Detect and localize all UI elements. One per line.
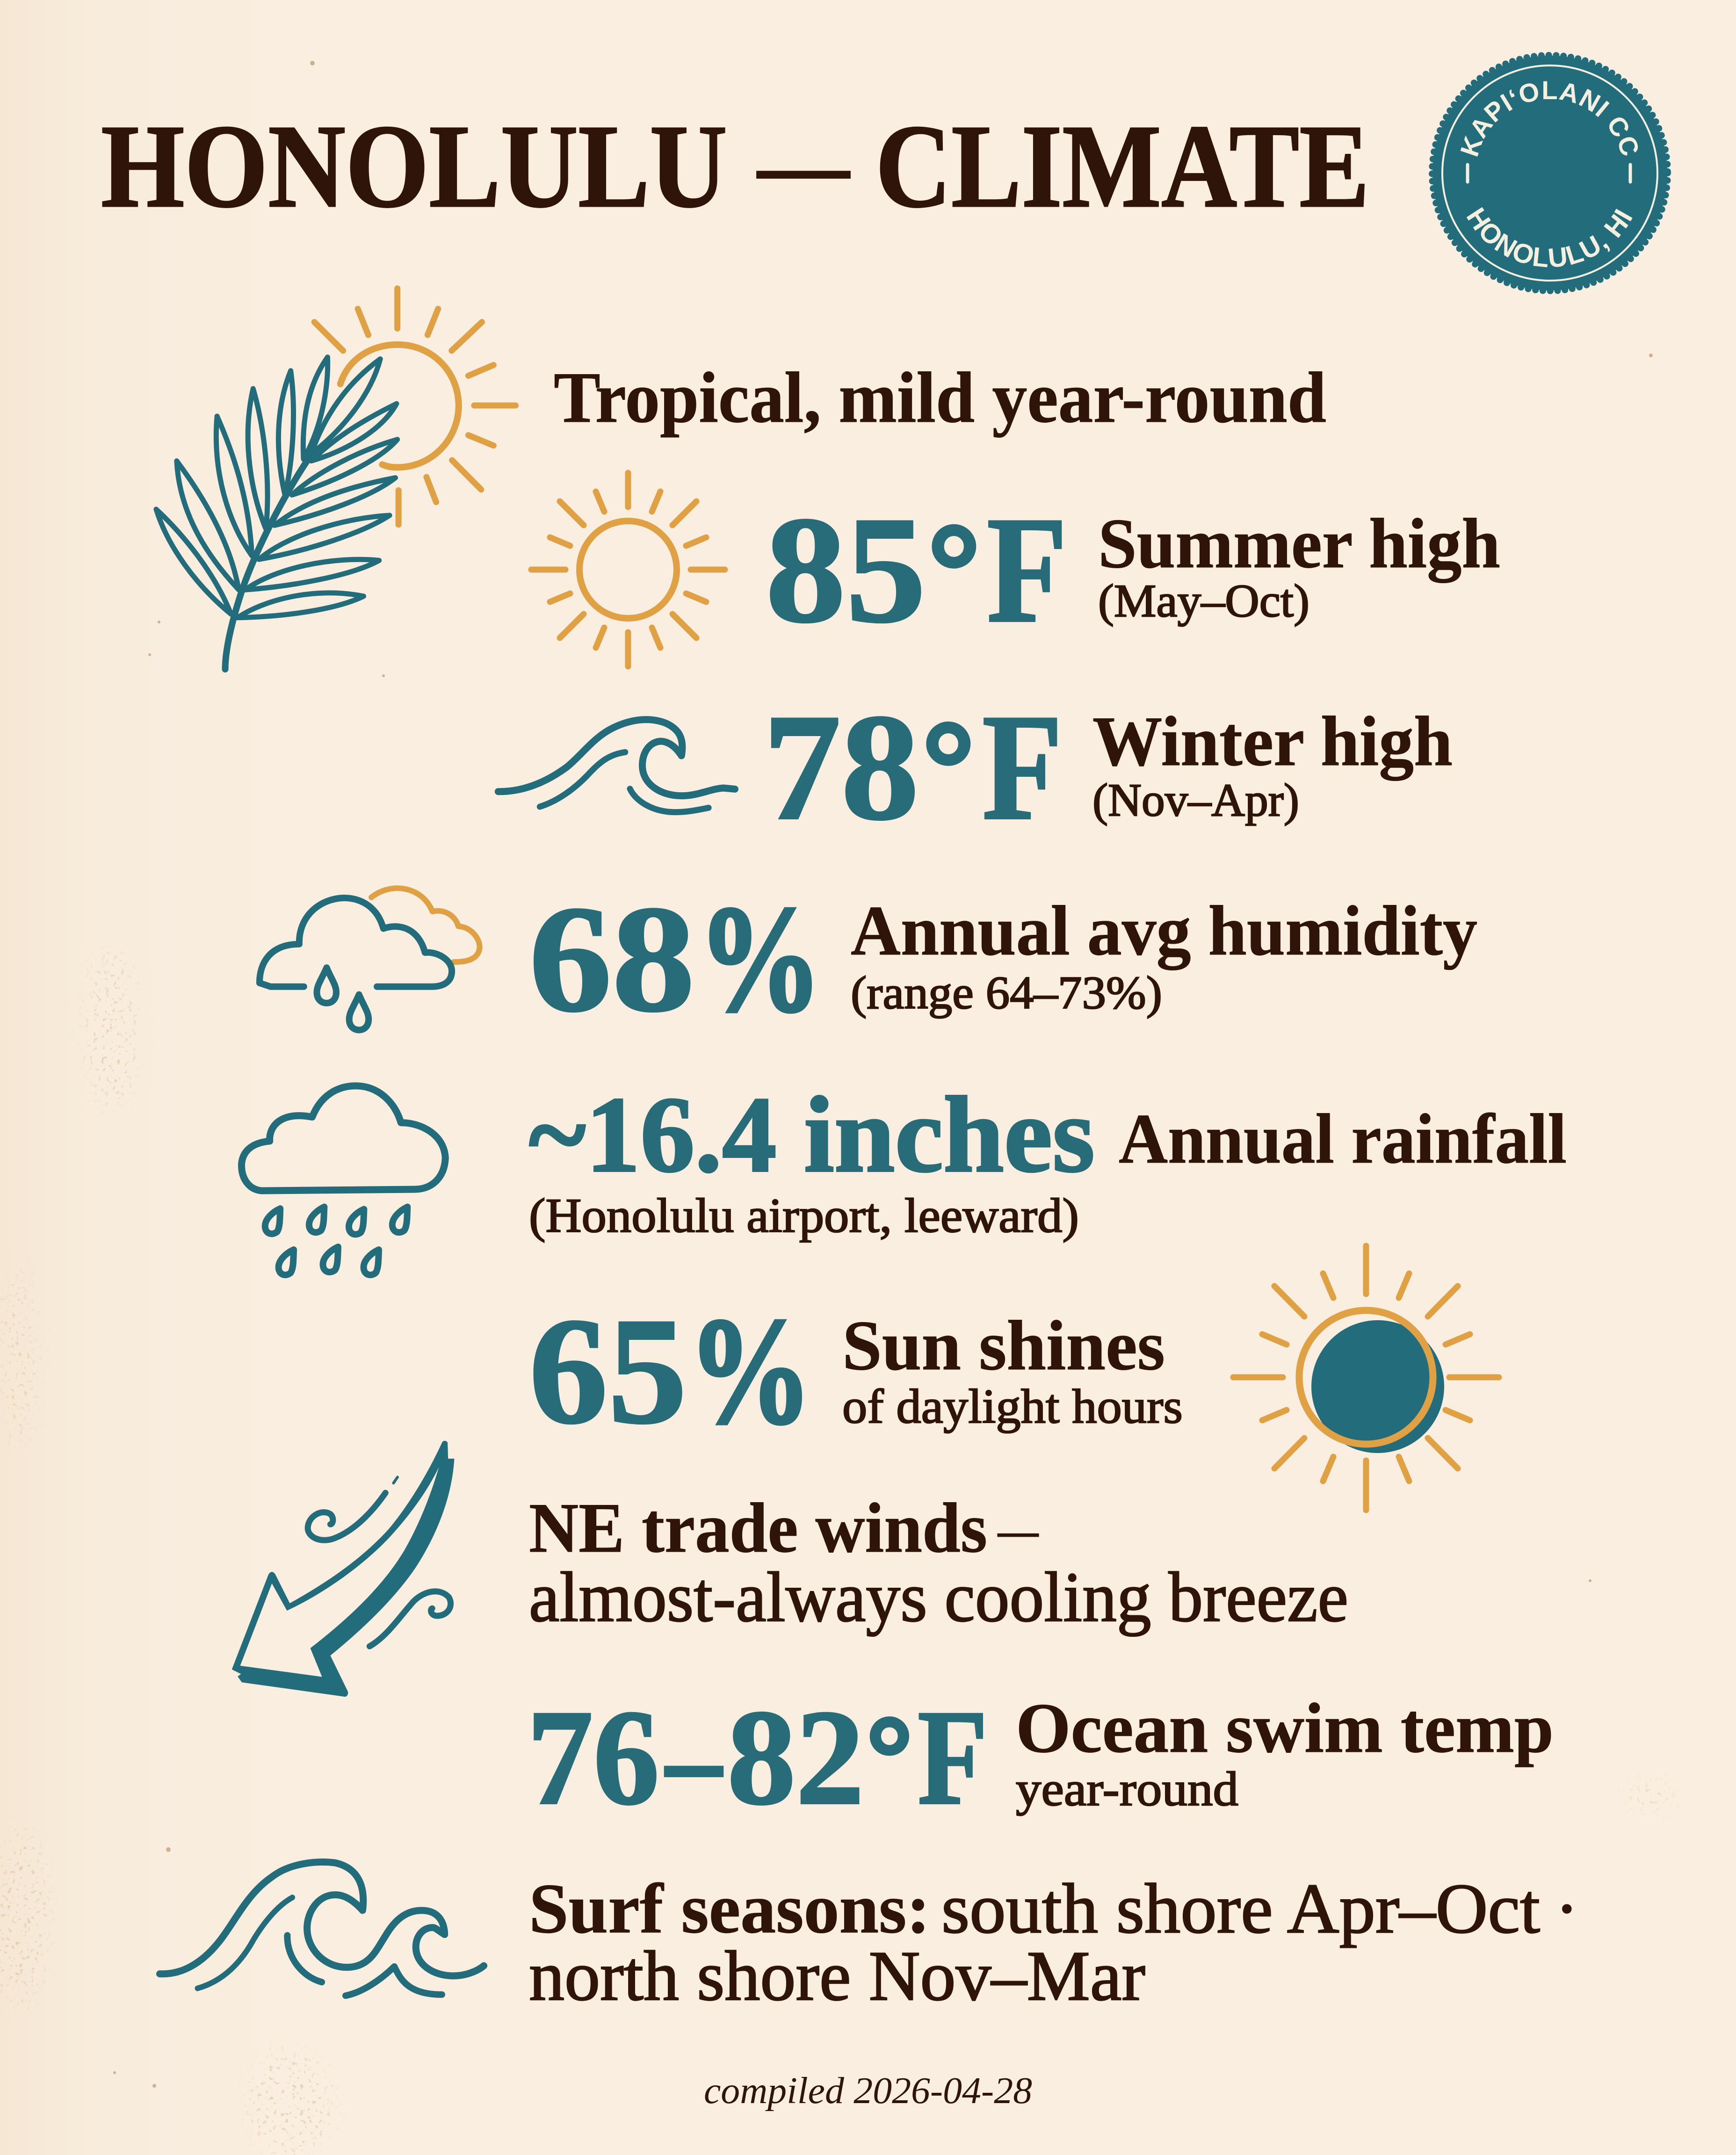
icon: palm leaf with sun [156, 289, 516, 669]
title: — [757, 97, 850, 229]
icon: sun with teal disc [1233, 1246, 1499, 1510]
icon: sun outline [531, 473, 725, 666]
label: Annual avg humidity [851, 891, 1477, 970]
icon: leaf fronds [156, 357, 398, 669]
sublabel: year-round [1016, 1762, 1238, 1816]
stat: ~16.4 inches rainfall [529, 1075, 1567, 1243]
south shore: south shore Apr–Oct [941, 1869, 1540, 1948]
south shore: · [1555, 1869, 1579, 1948]
title [101, 97, 1369, 232]
sublabel: (Nov–Apr) [1092, 774, 1299, 826]
number: ° [928, 497, 980, 642]
line one: NE trade winds [529, 1489, 987, 1567]
number: 76 [527, 1682, 659, 1833]
icon: cloud with sun-toned cloud and drops [260, 888, 480, 1030]
number: – [664, 1682, 724, 1833]
label: Ocean swim temp [1016, 1689, 1554, 1767]
stat: 85°F summer high [766, 485, 1500, 654]
number [529, 874, 822, 1043]
stamp: Kapi'olani CC, Honolulu HI [1432, 55, 1668, 291]
icon: wave [498, 720, 735, 812]
number: F [982, 682, 1063, 852]
icon: surf waves [160, 1862, 484, 1996]
line one: — [997, 1489, 1039, 1567]
number [529, 1286, 812, 1455]
sublabel: (Honolulu airport, leeward) [529, 1189, 1079, 1243]
text: tropical summary: Tropical, mild year-round [554, 357, 1326, 438]
number: F [918, 1682, 988, 1833]
sublabel: (range 64–73%) [851, 967, 1162, 1019]
stat: 78°F winter high [763, 682, 1453, 852]
icon: wind arrow [232, 1441, 454, 1697]
stamp: Kapi'olani CC, Honolulu HI: HONOLULU, HI [1461, 202, 1639, 274]
label: Annual rainfall [1119, 1099, 1567, 1178]
number: 65 [529, 1286, 687, 1455]
number: 68 [529, 874, 695, 1043]
number: ° [922, 694, 975, 839]
number: F [987, 485, 1067, 654]
number [527, 1682, 988, 1833]
sublabel: (May–Oct) [1098, 575, 1309, 627]
sublabel: of daylight hours [842, 1380, 1183, 1433]
line two: almost-always cooling breeze [529, 1558, 1348, 1636]
text: surf seasons [529, 1869, 1579, 2015]
title: CLIMATE [875, 101, 1369, 232]
number [763, 682, 1063, 852]
number: ~16.4 inches [529, 1075, 1095, 1195]
number: 85 [766, 485, 926, 654]
number: % [688, 1286, 812, 1455]
label: Winter high [1092, 702, 1453, 781]
icon: rain cloud [241, 1086, 445, 1275]
footer: compiled date: compiled 2026-04-28 [704, 2070, 1032, 2112]
title: HONOLULU [101, 101, 727, 232]
number: 82 [727, 1682, 864, 1833]
label: Summer high [1098, 504, 1500, 583]
text: trade winds [529, 1489, 1348, 1636]
surf heading: Surf seasons: [529, 1869, 930, 1948]
number: 78 [763, 682, 919, 852]
stat: 76–82°F ocean temp [527, 1682, 1554, 1833]
number: % [698, 874, 822, 1043]
number [766, 485, 1067, 654]
stat: 65% sunshine [529, 1286, 1183, 1455]
number: ° [867, 1693, 912, 1820]
north shore: north shore Nov–Mar [529, 1937, 1145, 2015]
stamp: Kapi'olani CC, Honolulu HI: KAPI‘OLANI CC [1454, 75, 1645, 160]
icon: partial sun behind leaf [314, 289, 516, 525]
label: Sun shines [842, 1306, 1165, 1385]
stat: 68% humidity [529, 874, 1477, 1043]
